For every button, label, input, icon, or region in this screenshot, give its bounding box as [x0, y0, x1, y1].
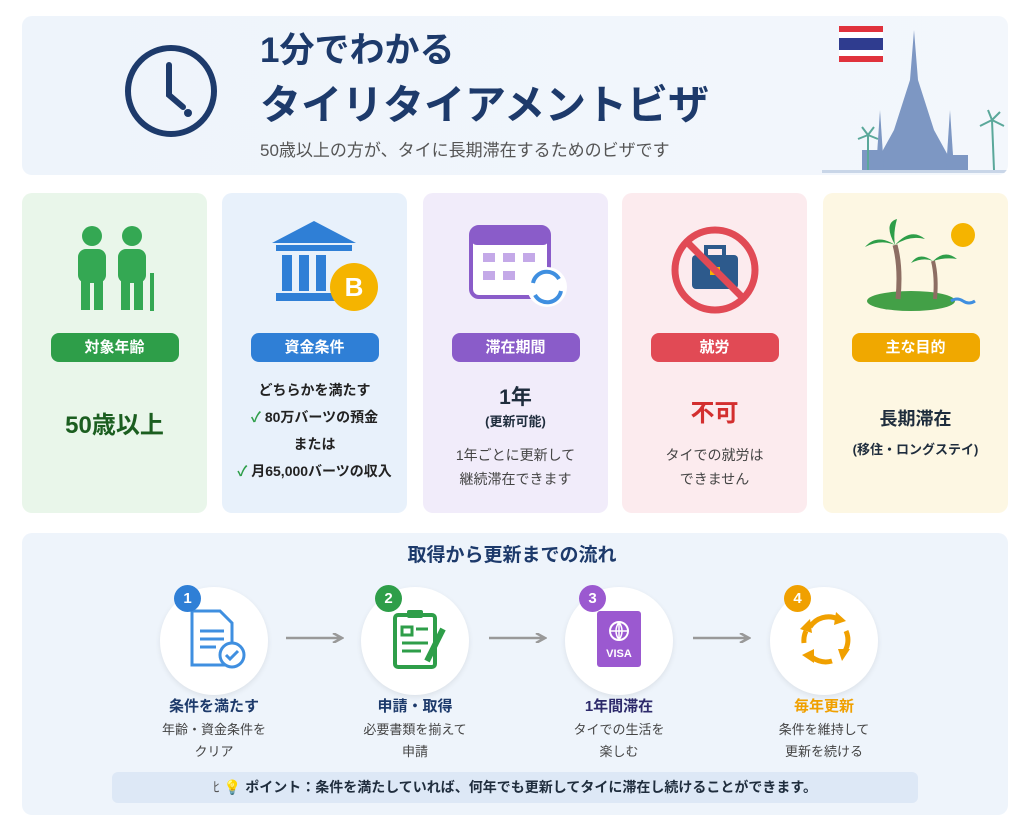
title: 1分でわかる — [260, 31, 454, 70]
text: 3 — [588, 590, 597, 607]
icon: document check — [190, 610, 246, 668]
point callout: ﾋ 💡 ポイント：条件を満たしていれば、何年でも更新してタイに滞在し続けることができます。 — [213, 779, 817, 795]
icon: calendar — [469, 225, 567, 307]
text: 年齢・資金条件を — [162, 722, 266, 737]
card: stay period: 継続滞在できます — [460, 471, 572, 487]
pill: 就労 — [650, 333, 778, 362]
arrow 1 — [286, 633, 344, 643]
text: クリア — [194, 744, 234, 759]
text: 更新を続ける — [785, 744, 863, 759]
text: fund conditions: どちらかを満たす — [258, 382, 370, 398]
text: 2 — [384, 590, 393, 607]
text: 条件を満たす — [169, 698, 259, 715]
card: work: できません — [680, 471, 749, 487]
text: 1年間滞在 — [585, 698, 653, 715]
point callout — [112, 772, 918, 803]
pill: 滞在期間: 滞在期間 — [485, 339, 546, 356]
pill: 対象年齢 — [50, 333, 178, 362]
step 1 — [160, 585, 268, 759]
card: stay period — [423, 193, 608, 513]
text: 4 — [793, 590, 802, 607]
text: fund conditions: ✓ 月65,000バーツの収入 — [237, 463, 392, 479]
icon: bank with coin — [272, 221, 378, 311]
flow panel — [22, 533, 1008, 815]
title — [260, 31, 709, 128]
header panel — [22, 16, 1008, 175]
text: fund conditions: または — [294, 436, 336, 452]
icon: visa passport — [597, 611, 641, 667]
icon: clock — [125, 45, 217, 137]
subtitle: 50歳以上の方が、タイに長期滞在するためのビザです — [260, 141, 670, 160]
arrow 2 — [489, 633, 547, 643]
icon: clipboard pen — [393, 610, 446, 669]
text: 必要書類を揃えて — [363, 722, 467, 737]
step 4 — [770, 585, 878, 759]
icon: visa passport: VISA — [606, 648, 632, 660]
card: work — [622, 193, 807, 513]
pill: 主な目的 — [852, 333, 980, 362]
icon: renew cycle — [800, 612, 850, 664]
text: 申請 — [402, 744, 428, 759]
text: 不可: 不可 — [690, 400, 738, 427]
pill: 主な目的: 主な目的 — [885, 339, 946, 356]
title: タイリタイアメントビザ — [260, 82, 709, 128]
card: work: タイでの就労は — [666, 447, 764, 463]
card: purpose: (移住・ロングステイ) — [853, 442, 978, 457]
card: purpose — [823, 193, 1008, 513]
step 2 — [360, 585, 470, 759]
text: fund conditions — [237, 382, 392, 479]
text: fund conditions: ✓ 80万バーツの預金 — [251, 409, 378, 425]
icon: elderly couple — [78, 226, 154, 311]
card: stay period: 1年ごとに更新して — [456, 447, 575, 463]
text: 毎年更新 — [794, 698, 854, 715]
pill: 資金条件: 資金条件 — [284, 339, 344, 356]
pill: 就労: 就労 — [699, 339, 730, 356]
arrow 3 — [693, 633, 751, 643]
step 3 — [564, 585, 674, 759]
flow heading: 取得から更新までの流れ — [407, 545, 616, 566]
text: 1 — [183, 590, 192, 607]
text: 条件を維持して — [779, 722, 869, 737]
text: タイでの生活を — [573, 722, 664, 737]
pill: 滞在期間 — [452, 333, 580, 362]
card: funds — [222, 193, 407, 513]
pill: 対象年齢: 対象年齢 — [84, 339, 144, 356]
text: 1年: 1年 — [499, 386, 532, 409]
pill: 資金条件 — [250, 333, 378, 362]
card: stay period: (更新可能) — [485, 414, 546, 429]
icon: thai flag — [839, 26, 883, 62]
text: 申請・取得 — [377, 698, 452, 715]
text: 長期滞在: 長期滞在 — [880, 409, 952, 429]
icon: temple — [822, 30, 1006, 173]
text: 楽しむ — [599, 744, 638, 759]
text: 50歳以上: 50歳以上 — [65, 412, 164, 439]
icon: no work — [672, 226, 758, 314]
card: target age — [22, 193, 207, 513]
icon: bank with coin: B — [345, 272, 363, 302]
icon: palm island — [865, 219, 976, 311]
